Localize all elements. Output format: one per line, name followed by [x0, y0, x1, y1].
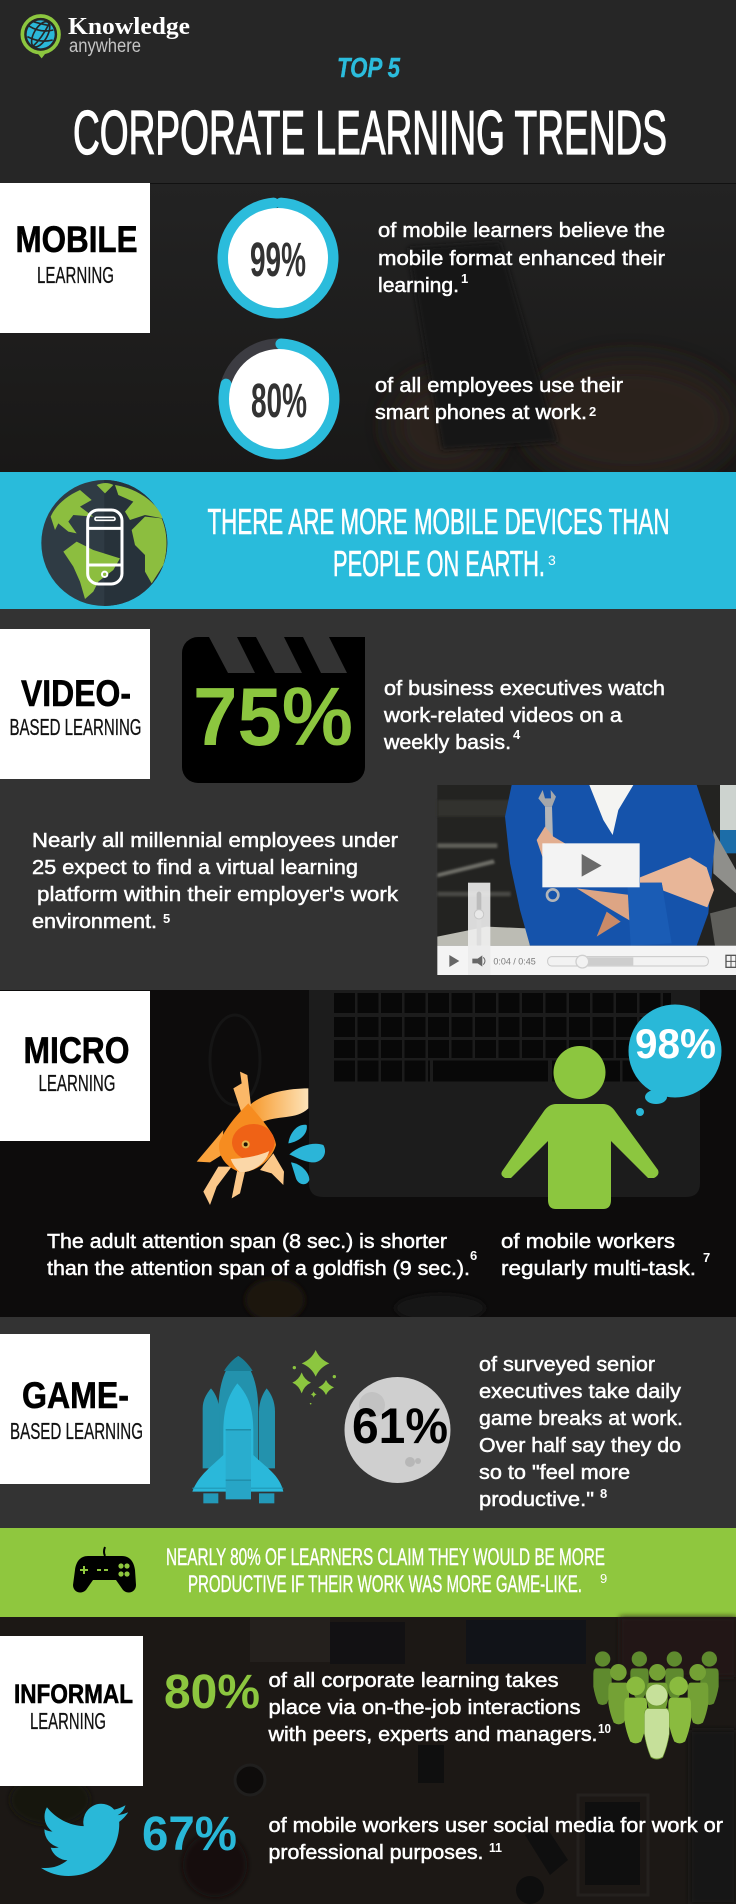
icon: group of people [593, 1651, 719, 1759]
text: goldfish attention span [47, 1231, 477, 1280]
text: 80% statistic: smart phones at work. [375, 402, 587, 424]
text: social media statistic: 11 [489, 1840, 502, 1855]
text: 80% statistic [375, 375, 623, 424]
text: 75% statistic: 4 [513, 727, 521, 742]
text: on-the-job learning: of all corporate learning takes [268, 1670, 558, 1692]
text: 99% statistic: learning. [378, 275, 459, 297]
donut chart: 80% [222, 342, 336, 456]
icon: moon with 61% [344, 1377, 450, 1483]
icon: space shuttle [192, 1356, 283, 1503]
text: millennial employees: 25 expect to find a virtual learning [32, 857, 358, 879]
header panel [0, 0, 736, 184]
callout text: 9 [600, 1571, 607, 1586]
logo: Knowledge Anywhere: anywhere [69, 36, 141, 57]
label box: game-based learning: BASED LEARNING [10, 1418, 143, 1444]
label box: game-based learning [0, 1334, 150, 1484]
text: millennial employees: Nearly all millennial employees under [32, 830, 398, 852]
control bar: 0:04 / 0:45 [493, 956, 536, 966]
icon: person with 98% thought bubble: 98% [635, 1020, 716, 1067]
label box: micro learning [0, 991, 150, 1141]
text: 80% statistic: of all employees use their [375, 375, 623, 397]
text: 75% statistic: work-related videos on a [383, 705, 623, 727]
label box: mobile learning [0, 183, 150, 333]
panel: video-based learning [0, 609, 736, 990]
icon: clapperboard with 75%: 75% [193, 670, 353, 763]
text: multi-task statistic: regularly multi-task. [501, 1258, 696, 1280]
label box: mobile learning: LEARNING [37, 262, 114, 288]
text: 99% statistic: 1 [461, 271, 468, 286]
callout text: PEOPLE ON EARTH. [333, 543, 545, 584]
label box: video-based learning: BASED LEARNING [10, 714, 142, 740]
text: 99% statistic: mobile format enhanced their [378, 248, 665, 270]
label box: mobile learning: MOBILE [16, 219, 138, 260]
text: 99% statistic: of mobile learners believe the [378, 220, 665, 242]
icon: twitter bird [41, 1804, 128, 1876]
background photo: hands holding a phone [390, 242, 735, 480]
heading: top 5: TOP 5 [337, 52, 400, 83]
panel: mobile learning [0, 183, 736, 480]
text: millennial employees: environment. [32, 911, 157, 933]
text: social media statistic [268, 1815, 723, 1864]
text: game breaks statistic: game breaks at work. [479, 1408, 683, 1430]
icon: person with 98% thought bubble [501, 1004, 722, 1209]
text: on-the-job learning [267, 1670, 611, 1746]
stat: 80%: 80% [164, 1666, 260, 1719]
text: on-the-job learning: 10 [598, 1721, 611, 1736]
text: millennial employees [32, 830, 399, 933]
volume slider [468, 883, 490, 975]
text: 75% statistic [383, 678, 665, 754]
label box: video-based learning: VIDEO- [21, 673, 131, 714]
panel: mobile devices banner [0, 472, 736, 609]
label box: game-based learning: GAME- [22, 1375, 129, 1416]
label box: video-based learning [0, 629, 150, 779]
text: game breaks statistic: executives take daily [479, 1381, 681, 1403]
panel: game-like work banner [0, 1528, 736, 1617]
label box: informal learning [0, 1636, 143, 1786]
label box: micro learning: LEARNING [38, 1070, 116, 1096]
stat: 67%: 67% [142, 1808, 237, 1861]
text: millennial employees: platform within their employer's work [37, 884, 399, 906]
icon: moon with 61%: 61% [352, 1398, 448, 1454]
text: game breaks statistic: productive." [479, 1489, 594, 1511]
text: multi-task statistic: of mobile workers [501, 1231, 675, 1253]
callout text [208, 501, 670, 584]
background photo: laptop on a dark desk [210, 990, 700, 1322]
text: millennial employees: 5 [163, 911, 170, 926]
logo: Knowledge Anywhere: Knowledge [68, 14, 190, 40]
text: goldfish attention span: The adult attention span (8 sec.) is shorter [47, 1231, 447, 1253]
icon: clapperboard with 75% [182, 637, 365, 783]
label box: informal learning: INFORMAL [14, 1679, 133, 1709]
text: 75% statistic: weekly basis. [383, 732, 511, 754]
text: goldfish attention span: 6 [470, 1248, 477, 1263]
callout text: 3 [548, 552, 556, 568]
text: game breaks statistic: of surveyed senior [479, 1354, 655, 1376]
donut chart: 80%: 80% [251, 375, 307, 428]
text: on-the-job learning: with peers, experts and managers. [267, 1724, 598, 1746]
label box: micro learning: MICRO [24, 1030, 130, 1071]
text: goldfish attention span: than the attention span of a goldfish (9 sec.). [47, 1258, 470, 1280]
text: multi-task statistic [501, 1231, 710, 1280]
icon: game controller [73, 1547, 136, 1592]
text: 80% statistic: 2 [589, 404, 596, 419]
text: on-the-job learning: place via on-the-job interactions [268, 1697, 580, 1719]
donut chart: 99%: 99% [250, 234, 306, 287]
panel: informal learning [0, 1617, 736, 1904]
label box: informal learning: LEARNING [30, 1708, 106, 1734]
text: social media statistic: professional purposes. [268, 1842, 484, 1864]
panel: micro learning [0, 990, 736, 1322]
icon: globe with phone [41, 480, 167, 606]
text: game breaks statistic: 8 [600, 1486, 607, 1501]
control bar [437, 946, 736, 975]
text: game breaks statistic [479, 1354, 683, 1511]
callout text [166, 1544, 607, 1598]
donut chart: 99% [220, 200, 336, 316]
background photo: team around a table [10, 1617, 736, 1904]
logo: Knowledge Anywhere [22, 14, 190, 58]
icon: goldfish with water drops [197, 1072, 325, 1205]
text: game breaks statistic: Over half say they do [479, 1435, 681, 1457]
icon: stars [292, 1350, 336, 1404]
video player [437, 785, 736, 975]
text: game breaks statistic: so to "feel more [479, 1462, 630, 1484]
play button overlay [542, 843, 640, 887]
text: 99% statistic [378, 220, 665, 297]
panel: game-based learning [0, 1317, 736, 1528]
text: multi-task statistic: 7 [703, 1250, 710, 1265]
text: social media statistic: of mobile workers user social media for work or [268, 1815, 723, 1837]
text: 75% statistic: of business executives watch [384, 678, 665, 700]
